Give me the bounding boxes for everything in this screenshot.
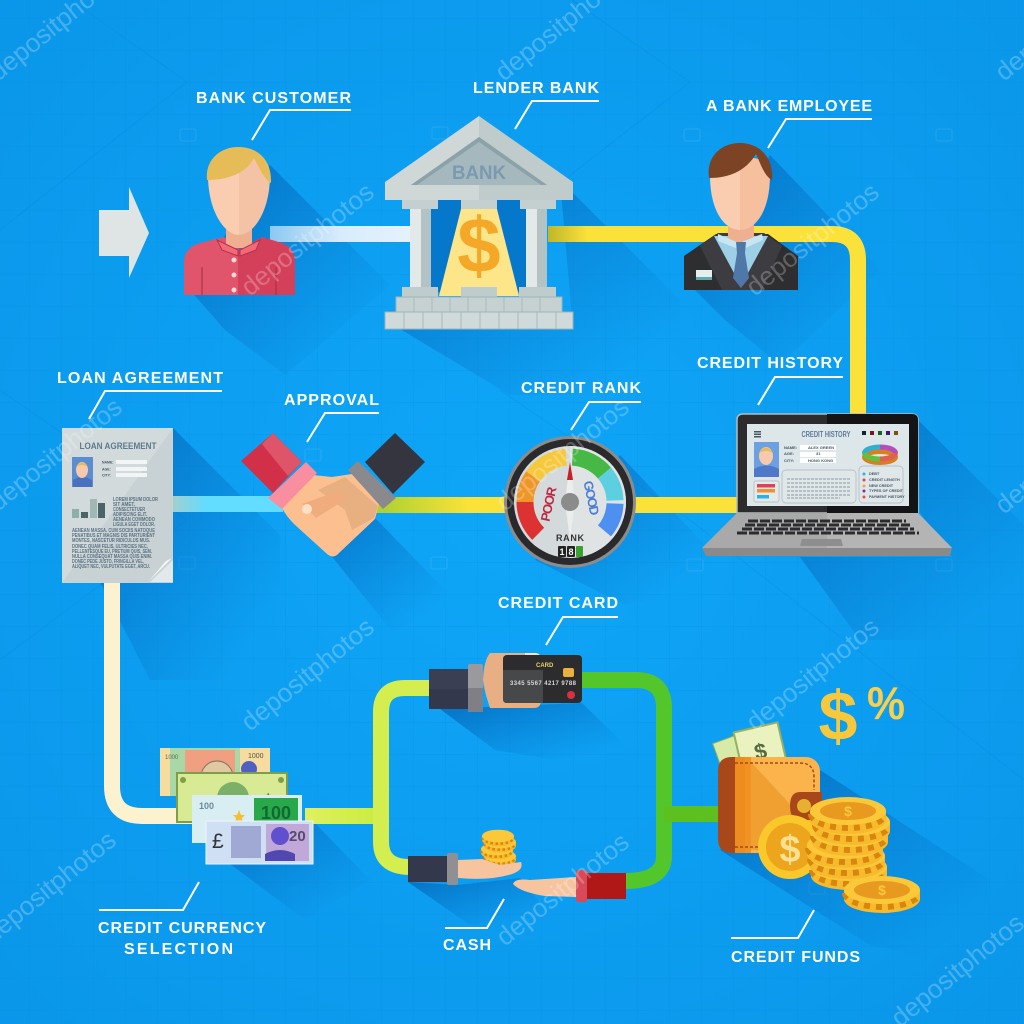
- icon: credit history laptop: [702, 414, 952, 556]
- watermarks: depositphotos: [740, 611, 885, 737]
- keyboard: [737, 521, 919, 533]
- text: document body: MONTES, NASCETUR RIDICULUS MUS.: [72, 538, 150, 544]
- label: credit funds: CREDIT FUNDS: [731, 949, 860, 966]
- connector: to wallet: [664, 806, 722, 822]
- icon: bank customer: [184, 147, 295, 295]
- connector: currency to split: [305, 808, 383, 824]
- receiving hand: [513, 870, 626, 902]
- icon: credit history laptop: ALEX GREEN: [808, 445, 834, 450]
- icon: credit history laptop: DEBT: [869, 472, 880, 476]
- icon: credit funds wallet: [713, 722, 920, 913]
- label: lender bank: LENDER BANK: [473, 80, 599, 97]
- icon: cash hands with coins: [408, 830, 626, 902]
- note: pound: 20: [289, 828, 306, 845]
- large coin: $: [779, 829, 801, 871]
- icon: credit card in hand: [429, 653, 582, 712]
- label: lender bank: [473, 80, 599, 129]
- connector: right loop: [578, 680, 664, 881]
- coin stack: [807, 797, 890, 890]
- laptop screen heading: CREDIT HISTORY: [802, 430, 851, 439]
- icon: credit history laptop: HONG KONG: [808, 458, 833, 463]
- connector: laptop to gauge: [630, 497, 740, 513]
- gauge label GOOD: GOOD: [580, 479, 602, 517]
- label: credit currency selection: [98, 882, 266, 958]
- text: document body: LOREM IPSUM DOLOR: [113, 497, 158, 503]
- label: credit funds: [731, 910, 860, 966]
- label: cash: [443, 899, 504, 954]
- text: document body: NULLA CONSEQUAT MASSA QUIS ENIM.: [72, 554, 152, 560]
- gauge digits: 1: [559, 547, 565, 557]
- note: euro: 100: [199, 801, 214, 811]
- long shadows: [100, 155, 1024, 970]
- note: yen: [160, 748, 270, 796]
- connector: gauge to handshake: [375, 497, 510, 513]
- label: credit currency selection: SELECTION: [124, 941, 233, 958]
- connector: upper left loop: [381, 688, 435, 816]
- watermarks: depositphotos: [235, 176, 380, 302]
- label: a bank employee: A BANK EMPLOYEE: [706, 98, 872, 115]
- label: credit history: [697, 355, 843, 405]
- icon: credit history laptop: TYPES OF CREDIT: [869, 489, 904, 493]
- coin stack small: [481, 830, 516, 866]
- card label: CARD: [536, 663, 554, 669]
- connector: lower left loop: [381, 816, 410, 867]
- connector: document to currency: [112, 580, 195, 816]
- watermarks: depositphotos: [740, 176, 885, 302]
- note: pound: £: [212, 830, 224, 853]
- coin stack: $: [844, 803, 852, 819]
- text: document body: DONEC QUAM FELIS, ULTRICIES NEC,: [72, 544, 148, 550]
- label: approval: APPROVAL: [284, 392, 379, 409]
- single coin: $: [878, 882, 886, 898]
- label: bank customer: BANK CUSTOMER: [196, 90, 351, 107]
- icon: credit history laptop: 31: [816, 451, 821, 456]
- single coin: [844, 876, 920, 913]
- watermarks: depositphotos: [235, 611, 380, 737]
- icon: credit history laptop: PAYMENT HISTORY: [869, 495, 905, 499]
- icon: credit history laptop: AGE:: [784, 451, 794, 456]
- icon: credit rank gauge: [504, 436, 636, 568]
- note: yen: 1000: [248, 753, 264, 760]
- label: credit history: CREDIT HISTORY: [697, 355, 843, 372]
- icon: loan agreement document: CITY:: [102, 474, 111, 478]
- note: euro: 100: [261, 803, 291, 823]
- banknotes in wallet: $: [752, 738, 769, 765]
- watermarks: depositphotos: [490, 391, 635, 517]
- icon: dollar and percent: [819, 677, 905, 755]
- icon: credit history laptop: NEW CREDIT: [869, 484, 894, 488]
- text: document body: AENEAN MASSA. CUM SOCIIS NATOQUE: [72, 528, 156, 534]
- icon: loan agreement document: AGE:: [102, 468, 111, 472]
- label: approval: [284, 392, 379, 442]
- text: document body: CONSECTETUER: [113, 507, 145, 513]
- text: document body: DONEC PEDE JUSTO, FRINGILLA VEL,: [72, 559, 144, 565]
- text: document body: AENEAN COMMODO: [113, 517, 155, 523]
- note: euro: [192, 795, 302, 843]
- label: loan agreement: LOAN AGREEMENT: [57, 370, 223, 387]
- note: pound: [206, 821, 313, 864]
- giving hand: [408, 853, 522, 885]
- connector: bank shadow on yellow bar: [548, 226, 588, 242]
- text: document body: PENATIBUS ET MAGNIS DIS PARTURIENT: [72, 533, 155, 539]
- text: document body: ALIQUET NEC, VULPUTATE EGET, ARCU.: [72, 564, 150, 570]
- gauge label POOR: POOR: [538, 485, 560, 523]
- flow connectors: [112, 226, 858, 881]
- note: yen: 1000: [165, 755, 179, 761]
- gauge label RANK: RANK: [556, 533, 584, 543]
- connector: handshake to document: [173, 496, 283, 512]
- icon: credit history laptop: NAME:: [784, 445, 797, 450]
- connector: customer to bank: [270, 226, 410, 242]
- watermarks: depositphotos: [490, 826, 635, 952]
- laptop donut chart: [864, 447, 896, 462]
- chart: document bars: [72, 499, 105, 518]
- icon: loan agreement document: [62, 428, 173, 583]
- text: document body: PELLENTESQUE EU, PRETIUM QUIS, SEM.: [72, 549, 152, 555]
- text: document body: LIGULA EGET DOLOR.: [113, 522, 155, 528]
- connector: bank to employee and laptop: [548, 234, 858, 416]
- text: document body: [72, 497, 158, 570]
- label: cash: CASH: [443, 937, 491, 954]
- percent symbol: %: [867, 677, 905, 729]
- label: a bank employee: [706, 98, 872, 148]
- large coin: [758, 815, 822, 879]
- icon: dollar sign: $: [457, 201, 501, 289]
- text: document body: ADIPISCING ELIT.: [113, 512, 147, 518]
- label: credit currency selection: CREDIT CURRENCY: [98, 920, 266, 937]
- gauge digits: 8: [568, 547, 574, 557]
- dollar symbol: $: [819, 677, 857, 755]
- label: credit rank: [521, 380, 641, 430]
- icon: credit history laptop: CITY:: [784, 458, 794, 463]
- icon: start arrow: [99, 187, 149, 278]
- gauge digits: [558, 546, 583, 557]
- icon: loan agreement document: NAME:: [102, 460, 113, 464]
- text: BANK on pediment: BANK: [452, 163, 506, 184]
- text: document title: LOAN AGREEMENT: [80, 441, 157, 452]
- label: credit card: [498, 595, 618, 645]
- icon: credit history laptop: CREDIT LENGTH: [869, 478, 900, 482]
- card number: 3345 5567 4217 9788: [510, 681, 577, 687]
- label: loan agreement: [57, 370, 223, 419]
- icon: lender bank: [385, 116, 573, 329]
- gauge scale arcs: [525, 457, 615, 534]
- note: dollar: [177, 773, 287, 822]
- label: credit rank: CREDIT RANK: [521, 380, 641, 397]
- label: credit card: CREDIT CARD: [498, 595, 618, 612]
- note: dollar: $: [262, 790, 274, 815]
- icon: currency notes: [160, 748, 313, 864]
- text: document body: SIT AMET,: [113, 502, 136, 508]
- banknotes in wallet: [713, 722, 786, 772]
- icon: approval handshake: [241, 433, 425, 556]
- label: bank customer: [196, 90, 351, 140]
- icon: bank employee: [684, 143, 798, 290]
